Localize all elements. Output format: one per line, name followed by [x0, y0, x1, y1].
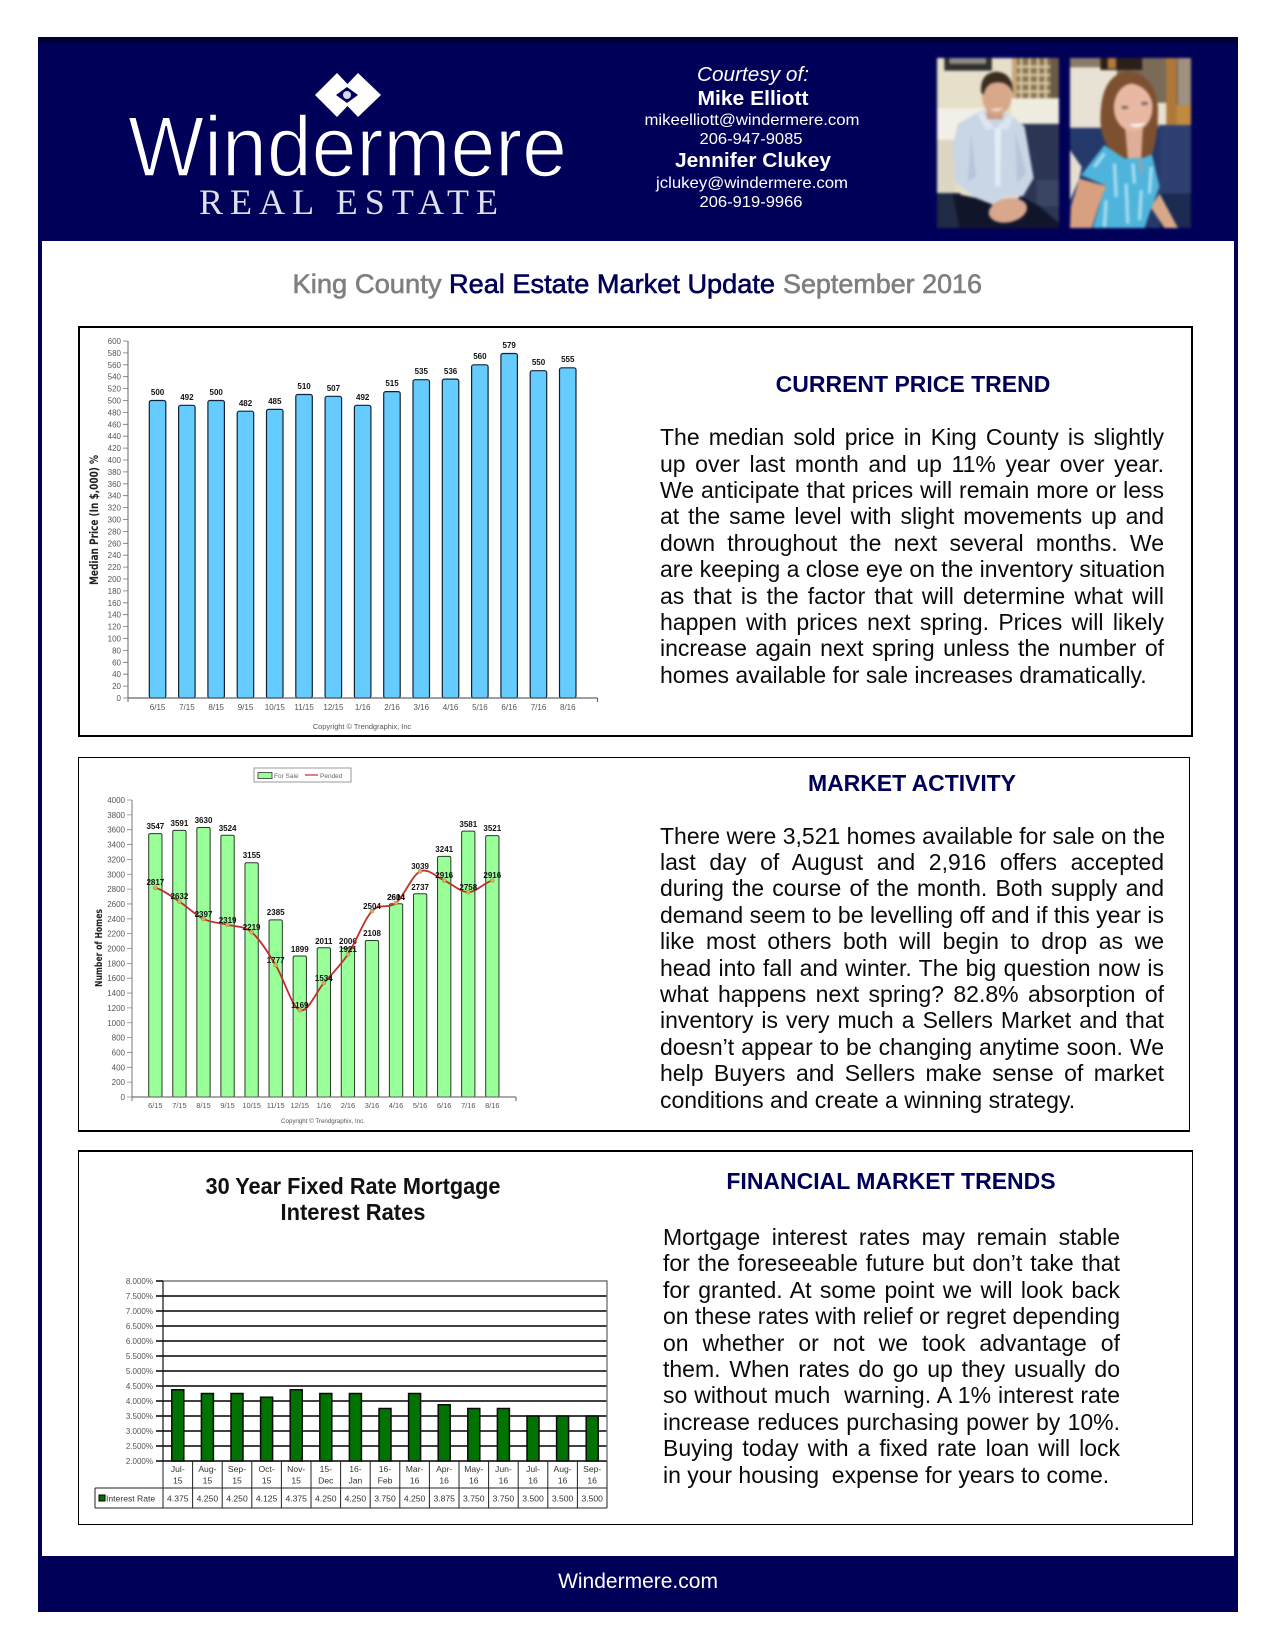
bar value labels: 515	[385, 379, 399, 388]
y axis labels	[108, 337, 128, 703]
data table	[95, 1461, 607, 1508]
y axis labels: 2800	[107, 885, 126, 894]
bar value labels: 536	[444, 367, 458, 376]
y axis labels: 5.500%	[126, 1352, 153, 1361]
text block: market activity: head into fall and winter. The big question now is	[660, 955, 1164, 981]
text block: price trend: increase again next spring unless the number of	[660, 635, 1164, 661]
y axis labels: 3000	[107, 870, 126, 879]
data table: Feb	[378, 1476, 393, 1486]
y axis labels: 500	[108, 396, 122, 406]
data table: Aug-	[554, 1464, 572, 1474]
y axis labels: 3.500%	[126, 1412, 153, 1421]
bar value labels: for sale: 3524	[219, 824, 237, 833]
y axis labels: 180	[108, 587, 122, 596]
data table: 16	[499, 1476, 508, 1486]
bar value labels: 550	[532, 358, 546, 367]
y axis labels: 2000	[107, 944, 126, 954]
data table: 16	[439, 1476, 449, 1486]
data table: 16	[558, 1476, 568, 1486]
bar value labels: 555	[561, 355, 575, 364]
line value labels: pended: 2397	[195, 910, 213, 919]
line value labels: pended: 2504	[363, 902, 381, 911]
y axis labels: 400	[108, 456, 122, 465]
y axis labels: 260	[108, 539, 122, 548]
contact details: jclukey@windermere.com	[655, 175, 848, 192]
y axis labels: 480	[108, 408, 122, 417]
y axis labels: 60	[112, 658, 122, 667]
heading: current price trend: CURRENT PRICE TREND	[776, 371, 1050, 397]
y axis title: Median Price (In $,000) %	[87, 455, 101, 585]
data table: 3.875	[433, 1494, 455, 1504]
bar value labels: 560	[473, 352, 487, 361]
y axis labels: 100	[108, 634, 122, 644]
title: King County	[292, 269, 442, 299]
data table: Oct-	[258, 1464, 275, 1474]
y axis labels: 80	[112, 646, 122, 655]
x axis: 4/16	[443, 703, 459, 712]
x axis	[132, 1097, 516, 1110]
x axis: 8/15	[208, 703, 225, 712]
text block: financial market trends: for granted. At some point we will look back	[663, 1277, 1120, 1303]
text block: financial market trends: in your housing expense for years to come.	[663, 1462, 1109, 1488]
y axis labels: 0	[121, 1093, 126, 1102]
bar value labels: for sale: 2011	[315, 937, 333, 946]
line value labels: pended: 2758	[459, 883, 478, 892]
y axis labels: 1200	[107, 1004, 126, 1013]
y axis labels: 5.000%	[126, 1367, 153, 1376]
line value labels: pended: 2319	[219, 916, 237, 925]
data table: 3.750	[493, 1494, 514, 1504]
y axis labels: 600	[108, 337, 122, 346]
bar value labels: for sale: 2604	[387, 893, 405, 902]
text block: financial market trends	[663, 1224, 1120, 1488]
data table: 16	[528, 1476, 538, 1486]
y axis labels: 4.000%	[126, 1397, 153, 1406]
icon: diamond mark	[315, 73, 381, 117]
bar value labels: for sale: 3547	[146, 822, 165, 831]
text block: financial market trends: increase reduces purchasing power by 10%.	[663, 1409, 1120, 1435]
line value labels: pended: 2916	[483, 871, 502, 880]
bar value labels: 535	[415, 367, 429, 376]
footer band	[38, 1556, 1238, 1612]
contact details	[644, 64, 860, 211]
panel: current price trend	[78, 326, 1193, 737]
y axis labels: 7.000%	[126, 1307, 153, 1316]
line value labels: pended: 1169	[291, 1001, 309, 1010]
text block: market activity: help Buyers and Sellers make sense of market	[660, 1060, 1164, 1086]
y axis labels: 120	[108, 623, 122, 632]
data table: 4.375	[167, 1494, 189, 1504]
y axis labels: 2.000%	[126, 1457, 153, 1466]
bar value labels: 485	[268, 397, 282, 406]
data table: 16	[410, 1476, 420, 1486]
x axis: 12/15	[291, 1101, 309, 1110]
data table: 4.250	[315, 1494, 337, 1504]
contact details: mikeelliott@windermere.com	[644, 112, 860, 129]
bar value labels: for sale: 3591	[171, 819, 189, 828]
photo: Jennifer Clukey	[1068, 56, 1193, 230]
text block: market activity	[660, 823, 1165, 1113]
y axis labels: 800	[112, 1034, 126, 1043]
y axis labels: 20	[112, 682, 122, 691]
x axis: 8/16	[560, 703, 576, 712]
data table: 16-	[379, 1464, 391, 1474]
data table: 15	[203, 1476, 212, 1486]
legend: Pended	[320, 773, 343, 780]
x axis: 12/15	[323, 703, 344, 712]
footer link text: Windermere.com	[558, 1570, 718, 1593]
x axis: 1/16	[317, 1101, 331, 1110]
y axis labels: 380	[108, 468, 122, 477]
data table: Sep-	[583, 1464, 601, 1474]
chart title	[206, 1173, 500, 1225]
line value labels: pended: 1534	[315, 974, 333, 983]
data table: Jan	[348, 1476, 363, 1486]
y axis labels: 560	[108, 361, 122, 370]
y axis labels: 3200	[107, 855, 126, 864]
x axis: 7/16	[461, 1101, 475, 1110]
y axis labels: 460	[108, 420, 122, 429]
y axis labels: 420	[108, 444, 122, 453]
data table: 4.375	[285, 1494, 307, 1504]
y axis labels: 580	[108, 349, 122, 358]
bar value labels: for sale: 2006	[339, 937, 357, 946]
logo wordmark: Windermere	[128, 100, 567, 195]
data table: Jun-	[495, 1464, 512, 1474]
x axis: 2/16	[341, 1101, 355, 1110]
text block: price trend: are keeping a close eye on the inventory situation	[660, 556, 1165, 582]
bars: for sale	[149, 828, 499, 1097]
data table: 15-	[320, 1464, 332, 1474]
data table: Apr-	[436, 1464, 452, 1474]
y axis labels: 4.500%	[126, 1382, 153, 1391]
heading: market activity: MARKET ACTIVITY	[808, 770, 1016, 796]
y axis labels: 2200	[107, 930, 126, 939]
y axis title: Number of Homes	[94, 909, 105, 987]
text block: financial market trends: Buying today with a fixed rate loan will lock	[663, 1435, 1120, 1461]
x axis: 6/15	[150, 703, 166, 712]
x axis: 10/15	[242, 1101, 261, 1110]
y axis labels: 600	[112, 1048, 126, 1057]
y axis labels: 340	[108, 492, 122, 501]
heading: financial market trends: FINANCIAL MARKET TRENDS	[726, 1168, 1056, 1194]
y axis labels: 6.500%	[126, 1322, 153, 1331]
bar value labels: 510	[297, 382, 311, 391]
data table: Dec	[318, 1476, 334, 1486]
text block: market activity: during the course of the month. Both supply and	[660, 875, 1164, 901]
data table: Jul-	[526, 1464, 540, 1474]
y axis labels: 2.500%	[126, 1442, 153, 1451]
line value labels: pended: 3039	[411, 862, 430, 871]
chart copyright: Copyright © Trendgraphix, Inc	[313, 722, 411, 731]
y axis labels: 3400	[107, 841, 126, 850]
data table: 15	[232, 1476, 242, 1486]
x axis: 6/15	[148, 1101, 163, 1110]
x axis: 10/15	[265, 703, 285, 712]
bar value labels: 482	[239, 399, 253, 408]
text block: market activity: inventory is very much a Sellers Market and that	[660, 1007, 1164, 1033]
x axis	[128, 698, 598, 712]
contact details: Jennifer Clukey	[675, 149, 832, 172]
y axis labels: 0	[117, 694, 122, 703]
y axis labels: 200	[108, 575, 122, 584]
bar value labels: 500	[151, 388, 165, 397]
y axis labels: 520	[108, 385, 122, 394]
y axis labels: 300	[108, 516, 122, 524]
y axis labels: 1400	[107, 989, 126, 998]
chart title: 30 Year Fixed Rate Mortgage	[206, 1173, 500, 1199]
chart copyright: Copyright © Trendgraphix, Inc.	[281, 1118, 365, 1125]
x axis: 9/15	[220, 1101, 235, 1110]
y axis labels: 4000	[107, 796, 126, 805]
data table: Sep-	[228, 1464, 246, 1474]
text block: price trend: happen with prices next spring. Prices will likely	[660, 609, 1164, 635]
header band	[38, 37, 1238, 241]
text block: market activity: doesn’t appear to be changing anytime soon. We	[660, 1034, 1164, 1060]
bar value labels: 500	[210, 388, 223, 397]
data table: May-	[464, 1464, 483, 1474]
data table: 4.250	[404, 1494, 426, 1504]
x axis: 8/15	[196, 1101, 211, 1110]
x axis: 2/16	[384, 703, 400, 712]
y axis labels: 160	[108, 599, 122, 608]
data table: Aug-	[198, 1464, 217, 1474]
line: pended	[155, 871, 492, 1010]
combo chart: homes for sale and pended	[94, 768, 517, 1125]
line value labels: pended: 1921	[339, 945, 357, 954]
y axis labels: 1000	[107, 1019, 126, 1028]
data table: 15	[291, 1476, 301, 1486]
text block: price trend: The median sold price in King County is slightly	[660, 424, 1164, 450]
data table: Mar-	[406, 1464, 424, 1474]
contact details: 206-947-9085	[700, 131, 803, 148]
data table: 4.250	[226, 1494, 248, 1504]
x axis: 5/16	[472, 703, 488, 712]
data table: 4.125	[256, 1494, 278, 1504]
bar value labels: for sale: 3521	[483, 824, 502, 833]
x axis: 3/16	[414, 703, 430, 712]
y axis labels: 240	[108, 551, 122, 560]
bar value labels: 507	[327, 384, 341, 393]
x axis: 8/16	[485, 1101, 499, 1110]
y axis labels: 1800	[107, 959, 126, 968]
text block: market activity: last day of August and 2,916 offers accepted	[660, 849, 1164, 875]
y axis labels: 2600	[107, 900, 126, 909]
contact details: Courtesy of:	[697, 64, 809, 86]
y axis labels: 3800	[107, 811, 126, 820]
text block: market activity: conditions and create a winning strategy.	[660, 1087, 1075, 1113]
logo subtitle: REAL ESTATE	[199, 182, 498, 222]
data table: 16	[587, 1476, 597, 1486]
y axis labels: 360	[108, 480, 122, 489]
data table: Nov-	[287, 1464, 305, 1474]
bar value labels: for sale: 1899	[291, 945, 309, 954]
y axis labels: 2400	[107, 915, 126, 924]
data table: 4.250	[197, 1494, 218, 1504]
y axis labels	[107, 796, 132, 1102]
line value labels: pended: 2614	[387, 893, 405, 902]
data table: 4.250	[345, 1494, 366, 1504]
x axis: 7/15	[179, 703, 195, 712]
text block: financial market trends: on whether or not we took advantage of	[663, 1330, 1120, 1356]
text block: financial market trends: for the foreseeable future but don’t take that	[663, 1250, 1120, 1276]
text block: price trend: at the same level with slight movements up and	[660, 503, 1164, 529]
x axis: 4/16	[389, 1101, 403, 1110]
bar value labels: for sale: 2737	[411, 883, 430, 892]
x axis: 11/15	[294, 703, 314, 712]
y axis labels: 6.000%	[126, 1337, 153, 1346]
text block: market activity: what happens next spring? 82.8% absorption of	[660, 981, 1164, 1007]
x axis: 6/16	[437, 1101, 451, 1110]
legend: For Sale	[274, 773, 299, 780]
text block: price trend	[660, 424, 1165, 688]
data table: 3.750	[463, 1494, 485, 1504]
title	[292, 269, 982, 299]
line markers: pended	[153, 869, 494, 1012]
y axis labels: 3600	[107, 826, 126, 835]
text block: price trend: homes available for sale increases dramatically.	[660, 662, 1147, 688]
bar value labels: for sale: 3581	[459, 820, 478, 829]
title: September 2016	[783, 269, 982, 299]
x axis: 7/15	[172, 1101, 187, 1110]
y axis labels: 140	[108, 611, 122, 620]
y axis labels: 440	[108, 432, 122, 441]
y axis labels: 1600	[107, 974, 126, 983]
bar chart: median price	[87, 337, 598, 731]
data table: 16-	[349, 1464, 362, 1474]
panel: market activity	[78, 757, 1190, 1132]
x axis: 3/16	[365, 1101, 379, 1110]
x axis: 6/16	[501, 703, 518, 712]
bar value labels	[151, 341, 575, 408]
x axis: 5/16	[413, 1101, 427, 1110]
data table: 15	[173, 1476, 183, 1486]
text block: market activity: like most others both will begin to drop as we	[660, 928, 1164, 954]
data table: 3.500	[581, 1494, 603, 1504]
line value labels: pended: 2817	[146, 878, 165, 887]
bar value labels: for sale: 2108	[363, 929, 381, 938]
data table: Interest Rate	[106, 1494, 155, 1504]
data table: 3.750	[374, 1494, 396, 1504]
panel: financial market trends	[78, 1150, 1193, 1525]
y axis labels: 220	[108, 563, 122, 572]
line value labels: pended: 1777	[267, 956, 285, 965]
data table: 3.500	[522, 1494, 544, 1504]
bar value labels: 492	[356, 393, 370, 402]
text block: financial market trends: Mortgage interest rates may remain stable	[663, 1224, 1120, 1250]
photo: Mike Elliott	[935, 56, 1061, 229]
y axis labels: 8.000%	[126, 1277, 153, 1286]
y axis labels: 40	[112, 670, 122, 679]
title: Real Estate Market Update	[449, 269, 775, 299]
y axis labels: 540	[108, 373, 122, 382]
text block: financial market trends: them. When rates do go up they usually do	[663, 1356, 1120, 1382]
line value labels: pended	[146, 862, 502, 1010]
y axis labels: 3.000%	[126, 1427, 153, 1436]
contact details: 206-919-9966	[700, 194, 803, 211]
bar value labels: 492	[180, 393, 194, 402]
line value labels: pended: 2916	[435, 871, 454, 880]
y axis labels	[126, 1277, 153, 1466]
contact details: Mike Elliott	[698, 87, 809, 110]
x axis: 7/16	[531, 703, 547, 712]
bar value labels: for sale: 3241	[435, 845, 454, 854]
bar value labels: for sale: 2385	[267, 908, 285, 917]
y axis labels: 400	[112, 1063, 126, 1072]
bar value labels: for sale	[146, 816, 502, 954]
text block: price trend: down throughout the next several months. We	[660, 530, 1164, 556]
text block: financial market trends: so without much warning. A 1% interest rate	[663, 1382, 1120, 1408]
text block: price trend: as that is the factor that will determine what will	[660, 583, 1164, 609]
bars	[149, 354, 576, 698]
data table: 3.500	[552, 1494, 574, 1504]
data table: 15	[262, 1476, 272, 1486]
x axis: 1/16	[355, 703, 371, 712]
y axis labels: 7.500%	[126, 1292, 153, 1301]
y axis labels: 320	[108, 504, 122, 513]
plot grid	[156, 1281, 607, 1461]
text block: market activity: There were 3,521 homes available for sale on the	[660, 823, 1165, 849]
text block: price trend: We anticipate that prices will remain more or less	[660, 477, 1164, 503]
chart title: Interest Rates	[280, 1199, 426, 1225]
text block: price trend: up over last month and up 11% year over year.	[660, 451, 1164, 477]
line value labels: pended: 2632	[171, 892, 189, 901]
bar chart: mortgage interest rates	[94, 1173, 608, 1508]
bar value labels: for sale: 3155	[243, 851, 261, 860]
bar value labels: 579	[503, 341, 516, 350]
y axis labels: 200	[112, 1078, 126, 1087]
x axis: 9/15	[238, 703, 254, 712]
bar value labels: for sale: 3630	[195, 816, 213, 825]
x axis: 11/15	[267, 1101, 285, 1110]
y axis labels: 280	[108, 527, 122, 536]
logo: Windermere Real Estate	[128, 73, 567, 222]
bars	[172, 1390, 598, 1461]
data table: Jul-	[171, 1464, 185, 1474]
data table: 16	[469, 1476, 479, 1486]
line value labels: pended: 2219	[243, 923, 261, 932]
legend	[254, 768, 351, 782]
text block: financial market trends: on these rates with relief or regret depending	[663, 1303, 1120, 1329]
text block: market activity: demand seem to be levelling off and if this year is	[660, 902, 1164, 928]
